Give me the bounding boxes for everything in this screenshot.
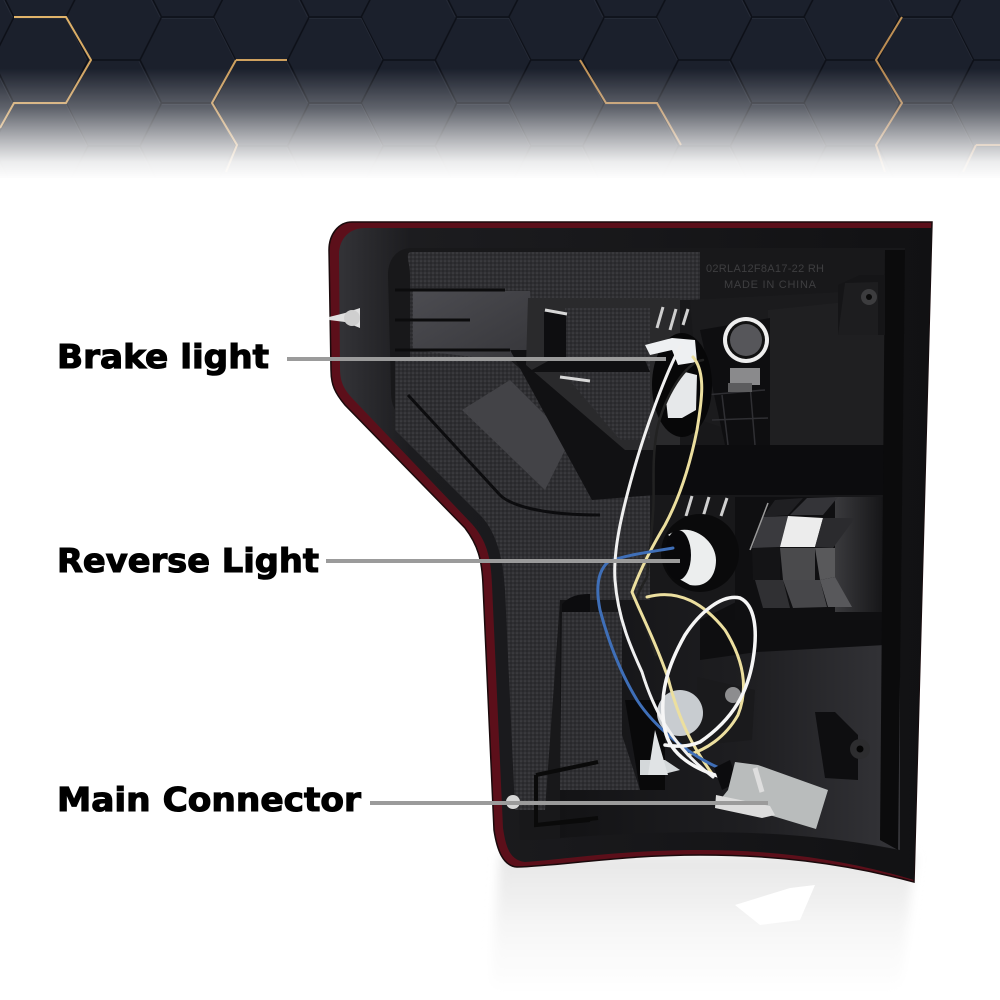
middle lens [686,496,885,620]
dark chevron band [510,350,655,500]
white loop [663,597,755,778]
left vertical textured band [395,360,650,810]
left upper bolt [329,308,360,328]
textured panel lower left [560,612,640,790]
yellow loop [647,595,744,755]
textured upper left surface [408,252,700,360]
ribbed reflector slats, top [657,307,688,330]
floor reflection [490,855,915,995]
right side wall [880,250,905,850]
label: brake light: Brake light [57,337,269,376]
leader line: brake light [287,357,666,361]
wires [598,347,755,778]
connector [714,760,828,829]
left lower mount and bolt [506,762,598,825]
housing rim [339,228,932,880]
molded text: 02RLA12F8A17-22 RH [706,263,824,275]
lighter square block [413,291,535,360]
label: main connector: Main Connector [57,780,362,819]
yellow wire [632,357,713,775]
lower bracket and bulb [640,677,755,775]
tail light housing [329,222,932,882]
smooth diagonal patch [462,380,570,490]
upper lens block [690,290,880,440]
callout: main connector [57,780,768,819]
reflection detail [735,885,815,925]
callout: brake light [57,337,666,376]
background: dark hexagon banner [0,0,1000,180]
reverse socket [661,514,739,592]
small round lens [723,317,769,363]
label: reverse light: Reverse Light [57,541,319,580]
leader line: reverse light [326,559,680,563]
white wire [615,347,713,777]
leader line: main connector [370,801,768,805]
inner panel [388,248,905,850]
mid dark band [655,445,890,495]
molded text: MADE IN CHINA [724,279,817,291]
recess with textured window [526,298,680,450]
callout: reverse light [57,541,680,580]
blue wire [598,548,717,767]
lower centre dark recess [560,600,900,850]
molded text [706,263,824,291]
housing outer shell with red edge [329,222,932,882]
top mounting hole [838,282,878,335]
black wire [637,360,703,655]
lower right mount [815,712,870,780]
brake socket [645,333,712,437]
